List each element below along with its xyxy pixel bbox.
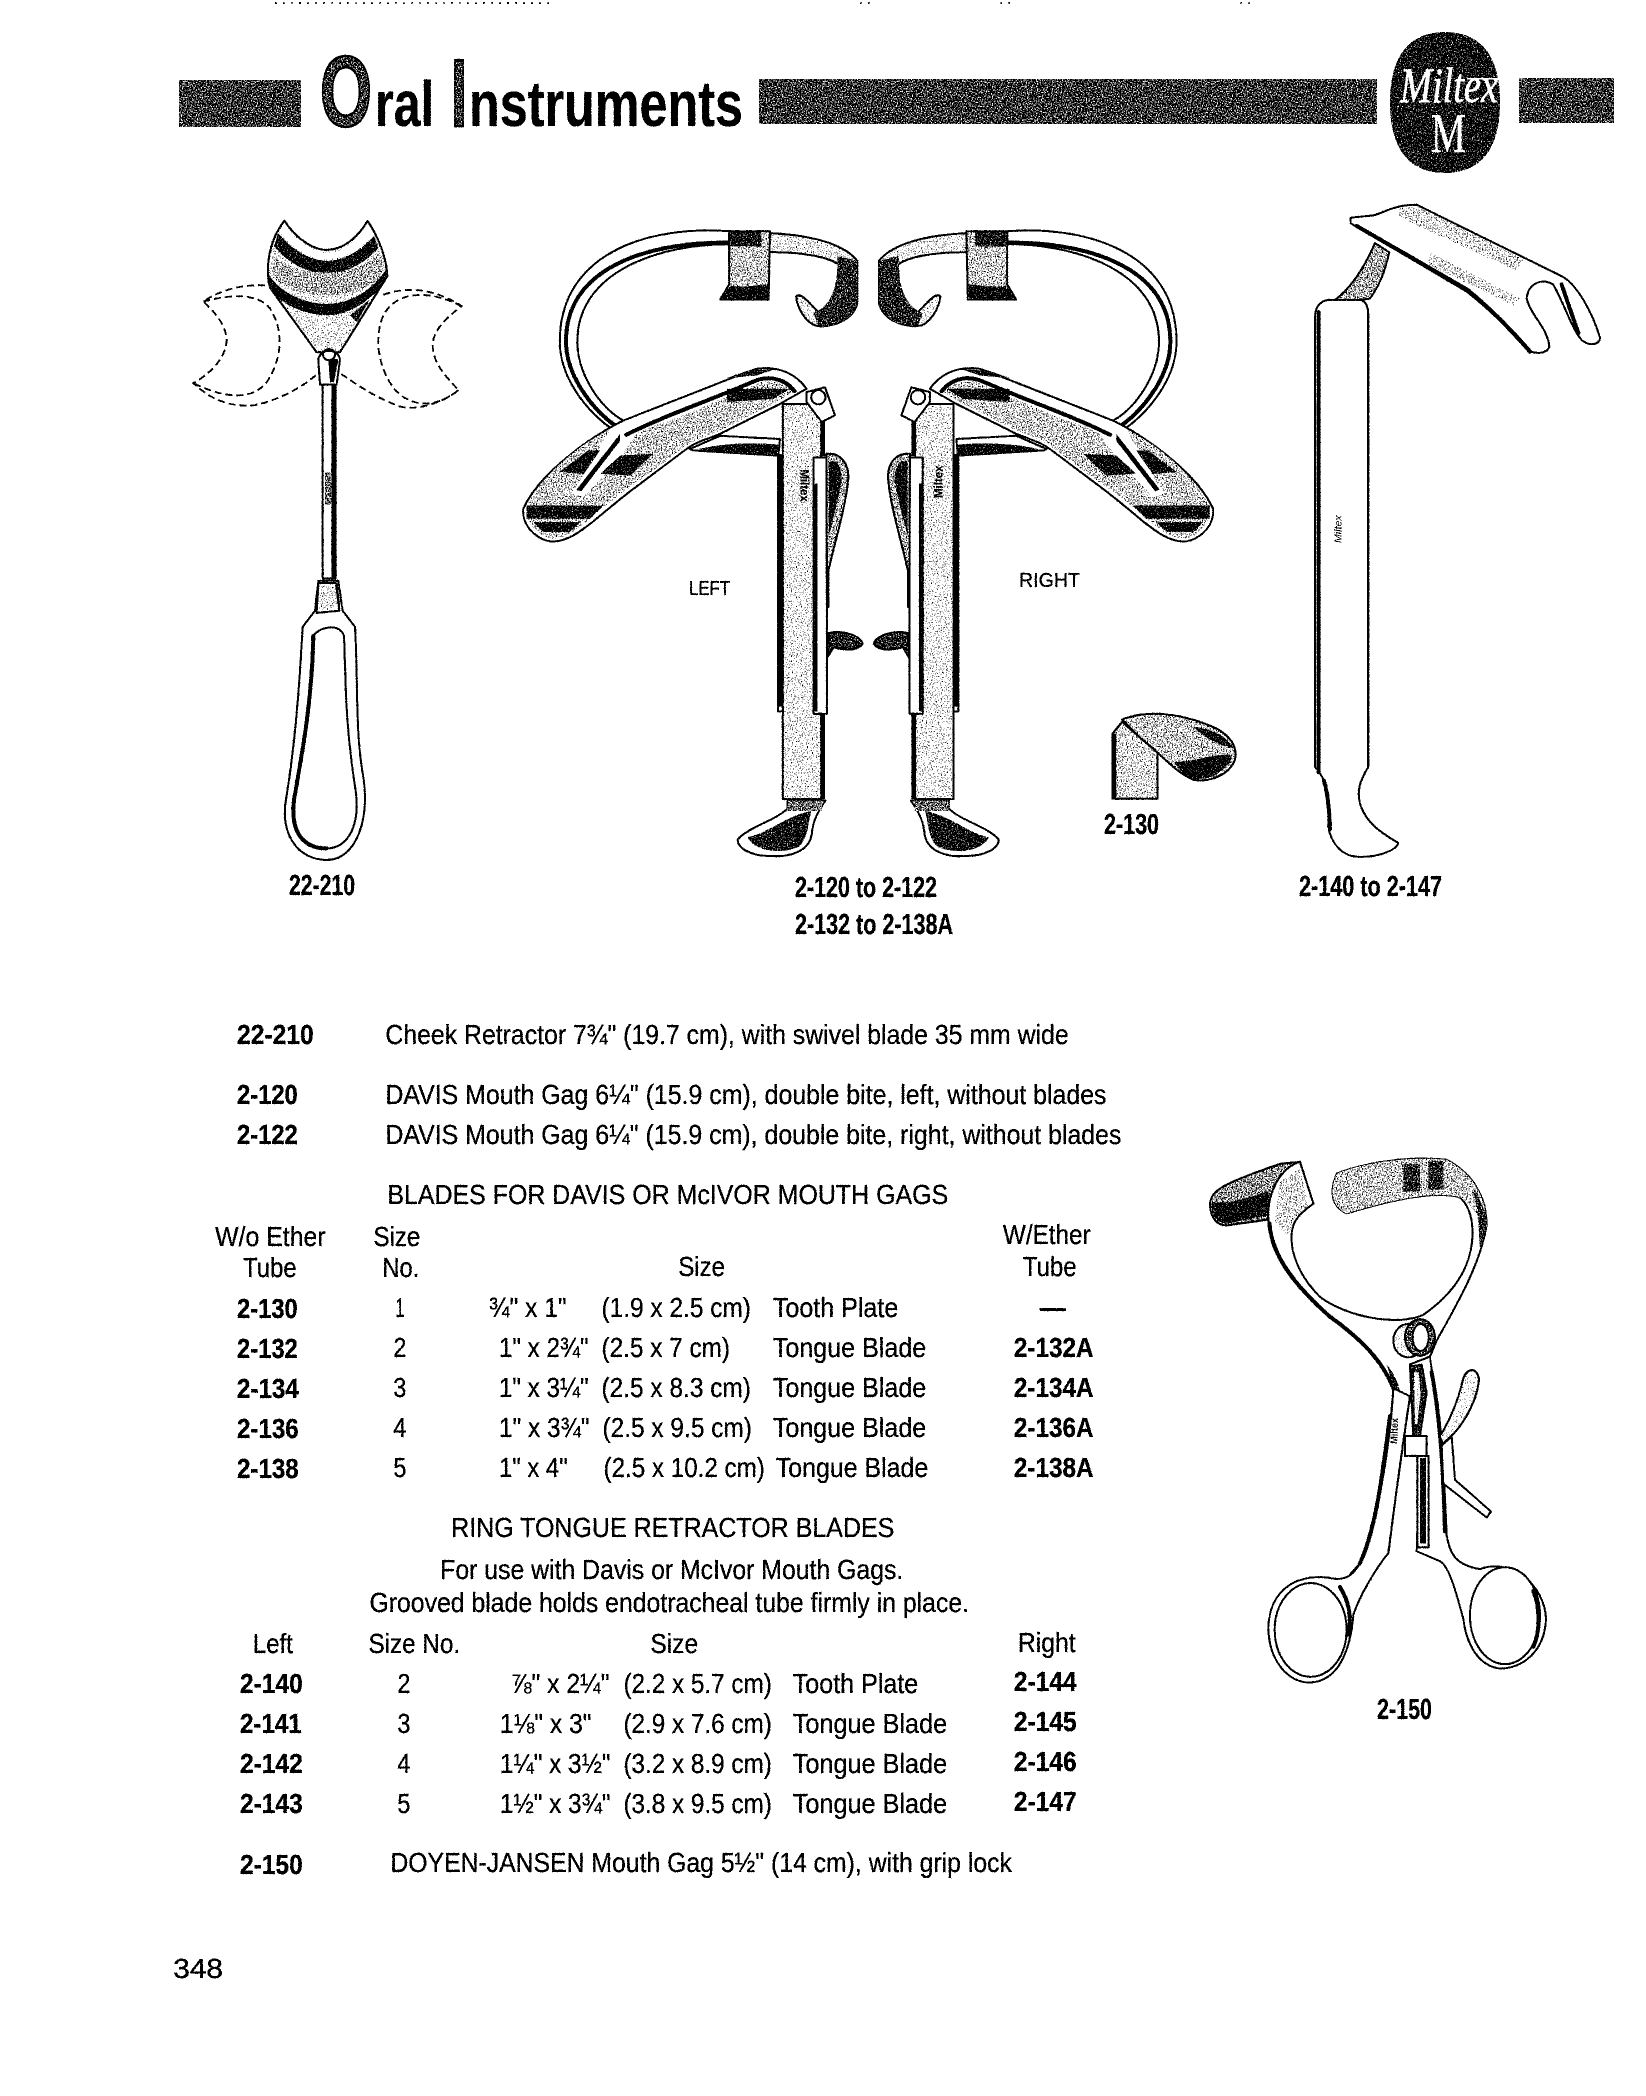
page number: 348 — [173, 1953, 223, 1984]
lever — [1440, 1370, 1479, 1444]
catalog entry: 2-122: 2-122 — [237, 1119, 298, 1150]
row 2-140: 2-140 — [240, 1668, 303, 1699]
table header: Size — [373, 1221, 420, 1252]
table header: Size — [650, 1628, 698, 1659]
row 2-132: 2-132A — [1014, 1332, 1094, 1363]
row 2-136: (2.5 x 9.5 cm) — [603, 1412, 752, 1443]
table: blades for Davis or McIvor mouth gags — [215, 1219, 1094, 1484]
title: ral — [375, 68, 434, 140]
illustration: Doyen-Jansen mouth gag 2-150 — [1210, 1159, 1546, 1726]
table header — [253, 1627, 1076, 1659]
label 2-140 to 2-147: 2-140 to 2-147 — [1299, 871, 1442, 903]
row 2-140: Tooth Plate — [793, 1668, 918, 1699]
row 2-143 — [240, 1786, 1077, 1819]
header bar middle — [759, 79, 1377, 124]
row 2-141 — [240, 1706, 1077, 1739]
section heading: blades: BLADES FOR DAVIS OR McIVOR MOUTH GAGS — [387, 1179, 948, 1210]
row 2-138: 1" x 4" — [499, 1452, 568, 1483]
row 2-141: 2-141 — [240, 1708, 302, 1739]
row 2-141: (2.9 x 7.6 cm) — [623, 1708, 772, 1739]
swivel blade positions (dashed) — [193, 285, 462, 408]
row 2-132 — [237, 1332, 1094, 1364]
row 2-138 — [237, 1452, 1094, 1484]
row 2-132: Tongue Blade — [773, 1332, 926, 1363]
row 2-141: Tongue Blade — [793, 1708, 947, 1739]
catalog entry: 2-150: 2-150 — [240, 1849, 303, 1880]
illustration: ring tongue retractor blade 2-140 to 2-147 — [1299, 205, 1600, 903]
catalog entry: 2-122: DAVIS Mouth Gag 6¼" (15.9 cm), double bite, right, without blades — [385, 1119, 1121, 1150]
row 2-130: Tooth Plate — [773, 1292, 898, 1323]
grooved blade — [1351, 205, 1600, 353]
neck — [1327, 243, 1389, 305]
table header — [215, 1219, 1091, 1283]
label RIGHT: RIGHT — [1019, 570, 1080, 592]
row 2-138: 2-138A — [1014, 1452, 1094, 1483]
row 2-140: ⅞" x 2¼" — [511, 1668, 610, 1699]
pivot — [806, 387, 835, 422]
illustration: tooth plate 2-130 — [1104, 714, 1236, 841]
label 2-132 to 2-138A: 2-132 to 2-138A — [795, 909, 953, 941]
retractor blade — [268, 221, 387, 352]
section heading: ring tongue retractor blades: RING TONGUE RETRACTOR BLADES — [451, 1512, 894, 1543]
header bar left — [179, 80, 301, 127]
logo: Miltex badge: M — [1431, 103, 1466, 165]
illustration: Doyen-Jansen mouth gag 2-150: Miltex — [1388, 1417, 1401, 1444]
row 2-141: 1⅛" x 3" — [500, 1708, 592, 1739]
title — [320, 36, 743, 148]
row 2-134: 2-134A — [1014, 1372, 1094, 1403]
row 2-136: 4 — [393, 1412, 406, 1443]
header bar right — [1519, 78, 1614, 123]
row 2-143: 5 — [397, 1788, 410, 1819]
engraved mark right: Miltex — [931, 465, 946, 498]
row 2-132: (2.5 x 7 cm) — [602, 1332, 730, 1363]
row 2-136: 1" x 3¾" — [499, 1412, 590, 1443]
row 2-136: Tongue Blade — [773, 1412, 926, 1443]
row 2-142: 2-142 — [240, 1748, 303, 1779]
logo: Miltex badge — [1390, 32, 1503, 173]
title: O — [320, 36, 372, 148]
sleeve and blade — [778, 455, 827, 711]
tooth bracket — [769, 233, 857, 326]
row 2-143: 2-147 — [1014, 1786, 1077, 1817]
left arm and ring — [1268, 1388, 1410, 1683]
row 2-141: 3 — [397, 1708, 410, 1739]
spring handle — [826, 454, 848, 607]
row 2-130 — [237, 1292, 1066, 1324]
table header: No. — [382, 1252, 419, 1283]
illustration: cheek retractor 22-210 — [193, 221, 462, 902]
table header: Tube — [243, 1252, 297, 1283]
table header: Tube — [1023, 1251, 1077, 1282]
illustration: ring tongue retractor blade 2-140 to 2-147: Miltex — [1333, 514, 1344, 543]
right arm and ring — [1410, 1357, 1546, 1668]
catalog entry: 2-120: DAVIS Mouth Gag 6¼" (15.9 cm), double bite, left, without blades — [385, 1079, 1107, 1110]
row 2-132: 2-132 — [237, 1333, 298, 1364]
row 2-138: (2.5 x 10.2 cm) — [604, 1452, 765, 1483]
row 2-142 — [240, 1746, 1077, 1779]
note: ring tongue blades usage: Grooved blade holds endotracheal tube firmly in place. — [369, 1587, 969, 1618]
label 2-130: 2-130 — [1104, 809, 1159, 841]
row 2-141: 2-145 — [1014, 1706, 1077, 1737]
table header: W/o Ether — [215, 1221, 326, 1252]
gag right — [874, 230, 1213, 856]
pivot ring — [1393, 1319, 1435, 1357]
table header: Size No. — [368, 1628, 460, 1659]
tongue plate — [523, 368, 806, 542]
row 2-143: Tongue Blade — [793, 1788, 947, 1819]
gag left — [523, 230, 862, 856]
row 2-142: (3.2 x 8.9 cm) — [623, 1748, 772, 1779]
catalog entry: 22-210: 22-210 — [237, 1019, 314, 1050]
row 2-143: 1½" x 3¾" — [500, 1788, 611, 1819]
table header: Right — [1018, 1627, 1076, 1658]
row 2-134 — [237, 1372, 1094, 1404]
handle — [285, 581, 365, 860]
label LEFT: LEFT — [689, 578, 730, 600]
row 2-138: Tongue Blade — [776, 1452, 928, 1483]
thumb tab — [827, 632, 862, 658]
note: ring tongue blades usage: For use with Davis or McIvor Mouth Gags. — [440, 1554, 903, 1585]
row 2-142: 1¼" x 3½" — [500, 1748, 611, 1779]
row 2-138: 5 — [393, 1452, 406, 1483]
row 2-130: 1 — [395, 1292, 404, 1323]
row 2-136: 2-136A — [1014, 1412, 1094, 1443]
row 2-134: 2-134 — [237, 1373, 299, 1404]
left tooth pad — [1210, 1162, 1313, 1225]
label 22-210: 22-210 — [289, 870, 355, 902]
catalog entry: 2-120: 2-120 — [237, 1079, 298, 1110]
cross bar — [690, 436, 780, 456]
row 2-132: 2 — [393, 1332, 406, 1363]
row 2-134: Tongue Blade — [773, 1372, 926, 1403]
catalog entry: 2-150 — [240, 1847, 1013, 1880]
row 2-134: (2.5 x 8.3 cm) — [602, 1372, 751, 1403]
table header: W/Ether — [1003, 1219, 1091, 1250]
pivot screw and shaft — [318, 349, 340, 578]
catalog text block — [173, 1019, 1121, 1984]
row 2-142: 4 — [397, 1748, 410, 1779]
row 2-140: 2 — [397, 1668, 410, 1699]
row 2-143: 2-143 — [240, 1788, 303, 1819]
row 2-134: 1" x 3¼" — [499, 1372, 589, 1403]
jaw frame — [1268, 1159, 1487, 1577]
illustration: Davis mouth gag left and right — [523, 230, 1213, 941]
row 2-130: 2-130 — [237, 1293, 298, 1324]
ratchet — [1417, 1456, 1429, 1547]
row 2-140: 2-144 — [1014, 1666, 1077, 1697]
row 2-130: (1.9 x 2.5 cm) — [602, 1292, 751, 1323]
blade body — [1315, 300, 1398, 857]
row 2-142: 2-146 — [1014, 1746, 1077, 1777]
table: ring tongue retractor blades — [240, 1627, 1077, 1819]
row 2-136 — [237, 1412, 1094, 1444]
wire arc — [560, 230, 729, 429]
blade foot — [738, 801, 825, 856]
title: nstruments — [469, 68, 743, 140]
table header: Size — [678, 1251, 725, 1282]
row 2-132: 1" x 2¾" — [499, 1332, 589, 1363]
row 2-136: 2-136 — [237, 1413, 299, 1444]
label 2-120 to 2-122: 2-120 to 2-122 — [795, 872, 937, 904]
table header: Left — [253, 1628, 293, 1659]
label 2-150: 2-150 — [1377, 1694, 1432, 1726]
row 2-140 — [240, 1666, 1077, 1699]
row 2-134: 3 — [393, 1372, 406, 1403]
row 2-143: (3.8 x 9.5 cm) — [623, 1788, 772, 1819]
logo: Miltex badge: Miltex — [1399, 57, 1498, 113]
title: I — [451, 40, 467, 147]
header band — [179, 32, 1614, 173]
engraved mark left: Miltex — [797, 469, 812, 502]
catalog entry: 2-150: DOYEN-JANSEN Mouth Gag 5½" (14 cm), with grip lock — [390, 1847, 1013, 1878]
row 2-138: 2-138 — [237, 1453, 299, 1484]
row 2-140: (2.2 x 5.7 cm) — [623, 1668, 772, 1699]
row 2-130: — — [1040, 1292, 1066, 1323]
row 2-142: Tongue Blade — [793, 1748, 947, 1779]
catalog entry: 22-210: Cheek Retractor 7¾" (19.7 cm), with swivel blade 35 mm wide — [385, 1019, 1069, 1050]
note: ring tongue blades usage — [369, 1554, 969, 1618]
row 2-130: ¾" x 1" — [489, 1292, 567, 1323]
